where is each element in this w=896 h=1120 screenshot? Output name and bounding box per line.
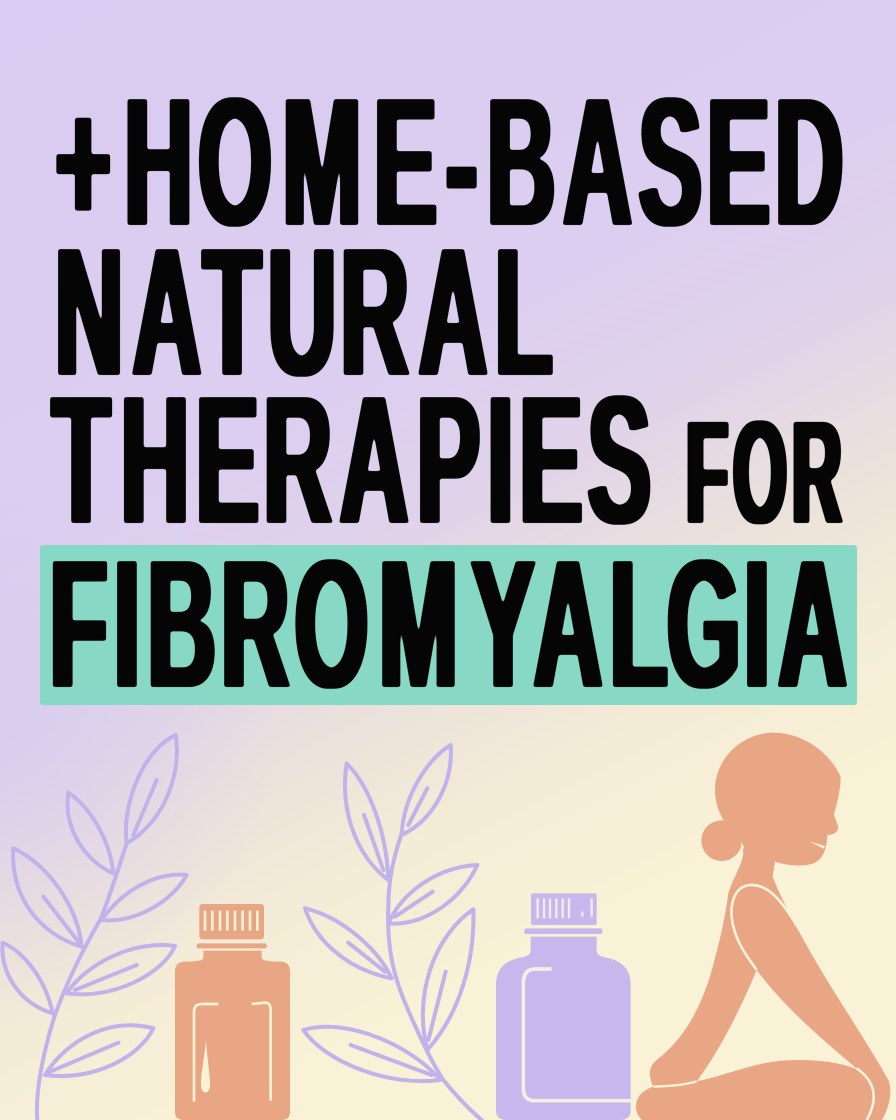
- icon: left herb sprig: [2, 735, 187, 1120]
- title line: THERAPIES: THERAPIES: [52, 357, 651, 562]
- icon: purple bottle: [496, 893, 631, 1120]
- title word: FOR: FOR: [686, 391, 842, 555]
- title line: NATURAL: NATURAL: [55, 209, 553, 414]
- icon: seated woman silhouette: [636, 733, 890, 1120]
- title: [52, 59, 844, 562]
- banner word: FIBROMYALGIA: FIBROMYALGIA: [50, 521, 847, 726]
- icon: centre herb sprig: [303, 745, 483, 1120]
- highlight banner: Fibromyalgia: [40, 521, 857, 726]
- icon: orange bottle: [175, 904, 290, 1120]
- title line: +HOME-BASED: +HOME-BASED: [55, 59, 844, 264]
